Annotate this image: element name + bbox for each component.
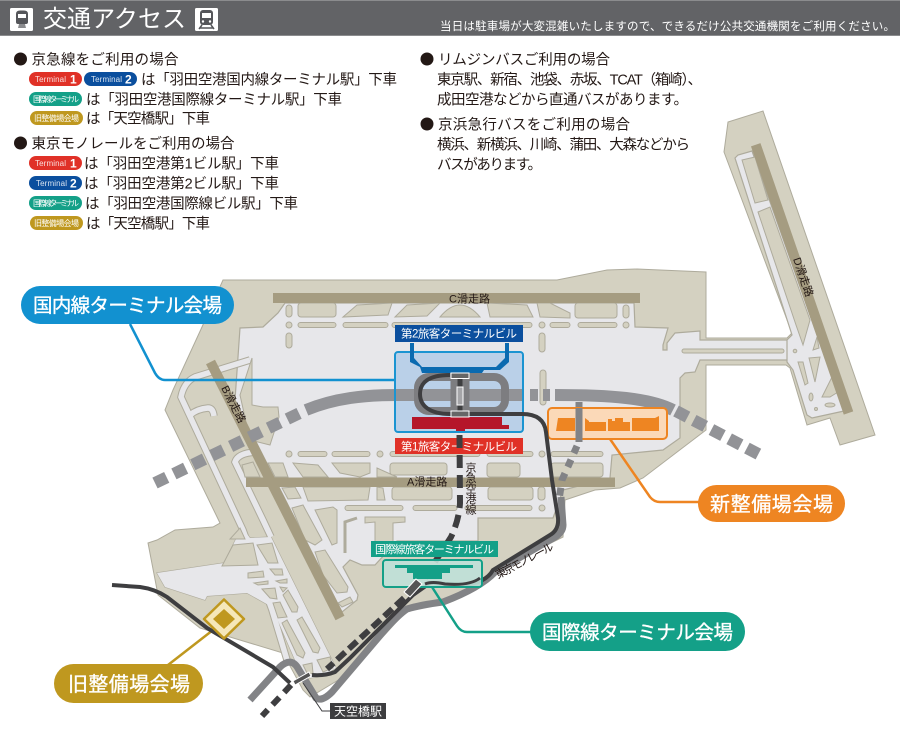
panel: limousine bus: 成田空港などから直通バスがあります。 (437, 92, 688, 108)
taxiways and aprons (157, 151, 844, 678)
icon: old maintenance diamond (204, 600, 244, 638)
callout: international venue: 国際線ターミナル会場 (542, 622, 733, 644)
monorail line (312, 414, 558, 675)
row: terminal 1: Terminal (35, 159, 66, 168)
row: terminal 1 and 2: 2 (125, 72, 132, 86)
callout: international venue (530, 612, 745, 651)
callout: domestic terminal venue (21, 286, 234, 324)
callout: new maintenance venue: 新整備場会場 (710, 493, 833, 516)
panel: limousine bus: リムジンバスご利用の場合 (438, 52, 610, 68)
header bar (0, 0, 900, 36)
road: connector and coastal route (250, 402, 579, 700)
line label: Keikyu: 京急空港線 (464, 462, 476, 515)
panel: limousine bus (420, 52, 702, 108)
label: terminal 2 (395, 325, 523, 342)
callout: new maintenance venue (698, 485, 845, 522)
label: terminal 2: 第2旅客ターミナルビル (401, 326, 517, 340)
panel: Keihin Kyuko bus: 京浜急行バスをご利用の場合 (438, 116, 630, 134)
panel: Tokyo Monorail access (14, 136, 298, 232)
callout: domestic terminal venue: 国内線ターミナル会場 (33, 295, 222, 317)
runway A: A滑走路 (407, 476, 447, 488)
runway B (210, 362, 340, 618)
row: international building: は「羽田空港国際線ビル駅」下車 (85, 196, 298, 212)
panel: Keihin Kyuko bus (420, 116, 690, 174)
row: old maintenance area: 旧整備場会場 (34, 113, 79, 123)
row: terminal 1 and 2 (29, 72, 397, 88)
label: international terminal: 国際線旅客ターミナルビル (375, 542, 494, 556)
row: international terminal: 国際線ターミナル (33, 94, 79, 104)
row: terminal 2: は「羽田空港第2ビル駅」下車 (84, 176, 279, 192)
bayshore road through box (396, 389, 522, 401)
taxiway islands (222, 157, 838, 675)
row: international terminal: は「羽田空港国際線ターミナル駅」下車 (86, 92, 342, 108)
runway D (756, 145, 848, 413)
terminal 2 and 1 box (395, 343, 523, 432)
line label: monorail: 東京モノレール (493, 540, 556, 582)
road: bayshore route (155, 395, 762, 483)
runway B: B滑走路 (218, 383, 248, 425)
row: terminal 1 and 2: は「羽田空港国内線ターミナル駅」下車 (141, 72, 397, 88)
bullet heading: monorail: 東京モノレールをご利用の場合 (32, 136, 235, 152)
panel: Keikyu line access (14, 52, 397, 128)
row: terminal 2: 2 (70, 176, 77, 190)
callout: old maintenance venue: 旧整備場会場 (68, 673, 190, 696)
panel: Keihin Kyuko bus: 横浜、新横浜、川崎、蒲田、大森などから (437, 136, 690, 154)
row: old maintenance area monorail: 旧整備場会場 (34, 218, 79, 228)
monorail and Keikyu in terminal (420, 375, 470, 414)
callout line: new maintenance (610, 439, 700, 502)
icon: train (195, 8, 218, 31)
runway C (273, 292, 640, 306)
row: old maintenance area monorail (30, 216, 210, 232)
panel: Keihin Kyuko bus: バスがあります。 (437, 156, 542, 174)
label: terminal 1: 第1旅客ターミナルビル (401, 440, 517, 454)
panel: limousine bus: 東京駅、新宿、池袋、赤坂、TCAT（箱崎）、 (437, 72, 702, 88)
icon: monorail (10, 8, 33, 31)
row: old maintenance area monorail: は「天空橋駅」下車 (86, 216, 210, 232)
Keikyu airport line (112, 435, 460, 716)
terminal 1 building (412, 417, 509, 431)
row: terminal 1 and 2: 1 (70, 72, 77, 86)
airport land (148, 111, 875, 697)
map: Haneda airport (112, 111, 875, 719)
row: old maintenance area (30, 110, 210, 128)
row: terminal 1 and 2: Terminal (35, 75, 66, 84)
new maintenance area box (548, 408, 667, 442)
callout: old maintenance venue (54, 664, 203, 703)
callout line: old maintenance (168, 630, 213, 665)
row: terminal 1: 1 (70, 156, 77, 170)
row: terminal 2: Terminal (36, 179, 67, 188)
loop road (418, 376, 505, 412)
row: international building: 国際線ターミナル (33, 198, 79, 208)
runway D: D滑走路 (790, 256, 816, 299)
callout line: domestic terminal (130, 324, 396, 380)
runway C: C滑走路 (449, 292, 490, 306)
row: terminal 1: は「羽田空港第1ビル駅」下車 (84, 156, 279, 172)
terminal 2 building (410, 343, 509, 373)
stations (451, 373, 469, 417)
label: Tenkubashi station: 天空橋駅 (334, 704, 382, 718)
Tenkubashi station marker (293, 672, 331, 711)
heading: access: 交通アクセス (43, 6, 186, 33)
runway A (246, 476, 615, 488)
row: terminal 1 and 2: Terminal (91, 75, 122, 84)
row: old maintenance area: は「天空橋駅」下車 (86, 110, 210, 128)
international terminal box (383, 560, 482, 597)
callout line: international (432, 587, 532, 632)
header note: 当日は駐車場が大変混雑いたしますので、できるだけ公共交通機関をご利用ください。 (440, 19, 895, 33)
label: terminal 1 (395, 438, 523, 454)
bullet heading: Keikyu: 京急線をご利用の場合 (32, 52, 179, 68)
